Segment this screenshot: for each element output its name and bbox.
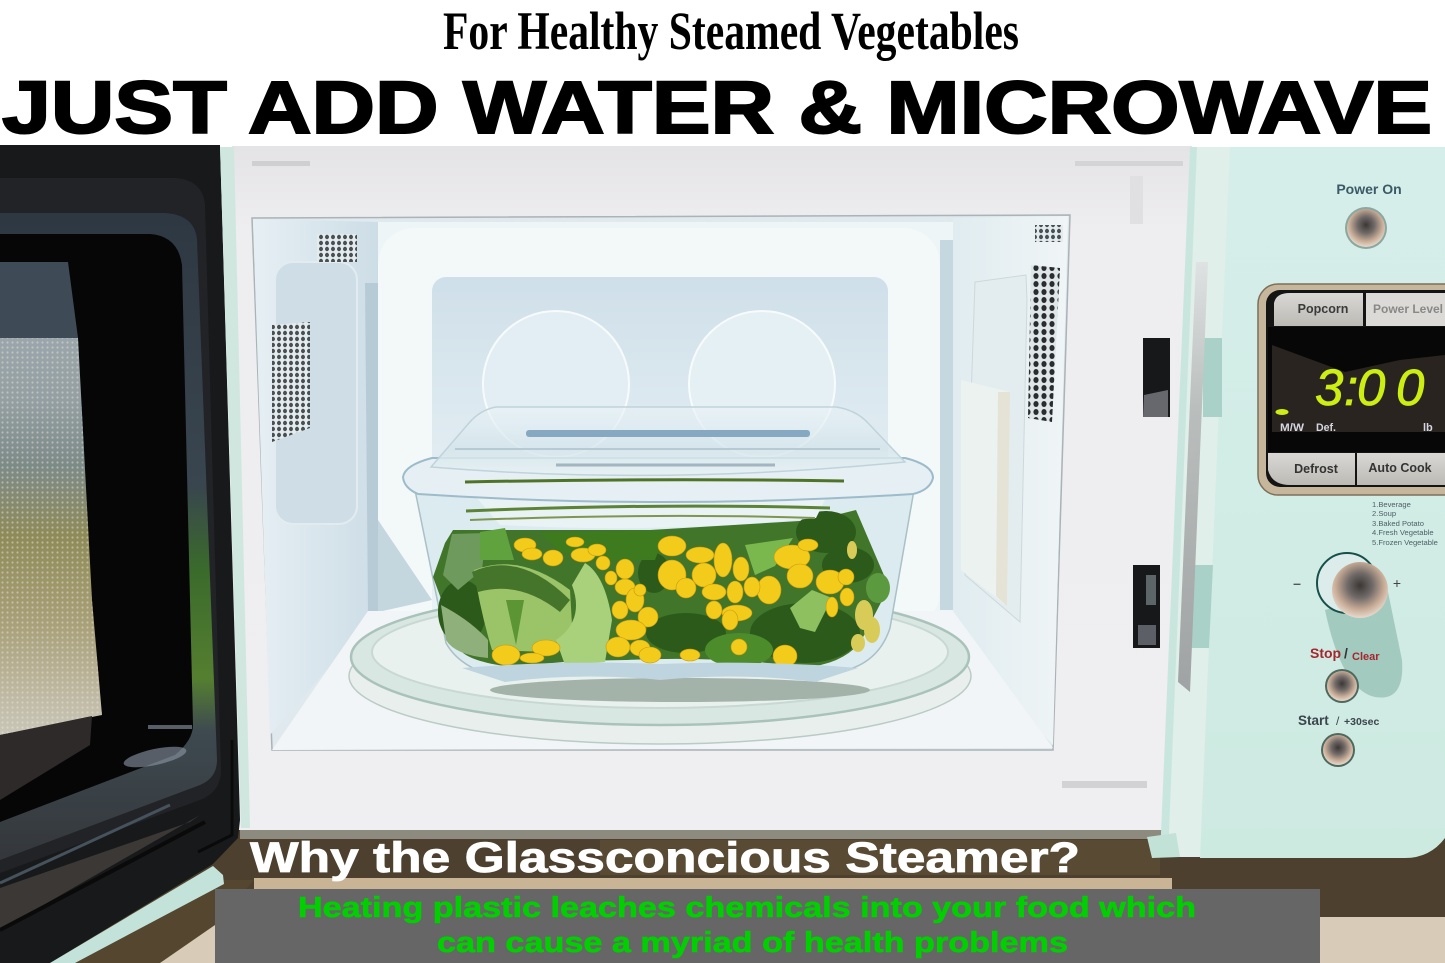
stop clear label — [1310, 645, 1380, 663]
light broccoli — [441, 528, 890, 667]
start label: Start — [1298, 713, 1329, 728]
keypad display — [1258, 284, 1445, 495]
door latch slots — [1133, 338, 1170, 648]
right wall — [953, 216, 1068, 745]
dish reflections — [462, 490, 858, 682]
vent meshes — [272, 225, 1063, 442]
panel body — [1200, 147, 1445, 858]
start button — [1321, 733, 1355, 767]
screen — [1268, 327, 1445, 452]
popcorn key: Popcorn — [1298, 302, 1348, 316]
display labels: lb — [1423, 422, 1433, 434]
dial shadow — [1325, 592, 1402, 698]
oven cavity — [252, 215, 1070, 750]
dish body — [415, 490, 914, 680]
defrost key: Defrost — [1294, 462, 1339, 476]
power level key: Power Level — [1373, 302, 1443, 316]
defrost key — [1268, 453, 1355, 485]
power level key — [1366, 293, 1445, 326]
start label: / — [1336, 714, 1340, 728]
stop clear label: Stop — [1310, 645, 1341, 661]
panel foot tab — [1147, 833, 1180, 858]
auto cook menu list: 2.Soup — [1372, 509, 1396, 518]
start label: +30sec — [1344, 716, 1379, 728]
callout text line 2: can cause a myriad of health problems — [437, 927, 1068, 959]
selector dial: – — [1293, 575, 1301, 591]
panel side strip — [1162, 147, 1232, 857]
callout background — [215, 889, 1320, 963]
subheading: Why the Glassconcious Steamer? — [250, 834, 1080, 882]
door gloss highlight — [122, 725, 192, 771]
countertop background — [40, 830, 1445, 963]
microwave white front — [232, 146, 1192, 830]
door lower mint trim — [50, 866, 224, 963]
stop clear label: Clear — [1352, 651, 1380, 663]
stop button — [1325, 669, 1359, 703]
door lower bands — [0, 805, 205, 930]
door inner black well — [0, 234, 193, 822]
waveguide cover — [961, 275, 1027, 622]
auto cook menu list: 5.Frozen Vegetable — [1372, 538, 1438, 547]
food mass — [433, 510, 889, 667]
dish rim — [403, 458, 933, 502]
keypad frame — [1258, 284, 1445, 495]
lid handle highlight — [526, 430, 810, 437]
lid bands — [455, 449, 880, 482]
turntable — [349, 589, 971, 744]
back wall recess — [432, 277, 888, 627]
power on label: Power On — [1336, 181, 1402, 197]
auto cook key — [1357, 453, 1445, 485]
glass lid — [431, 407, 905, 475]
display labels: M/W — [1280, 422, 1305, 434]
callout — [215, 889, 1320, 963]
glass steamer dish — [403, 407, 933, 682]
microwave body — [232, 146, 1192, 830]
time readout: 3:00 — [1315, 359, 1424, 416]
display labels — [1280, 422, 1433, 434]
pale corn by dish wall — [847, 541, 880, 652]
left wall — [253, 219, 378, 735]
auto cook menu list: 1.Beverage — [1372, 500, 1411, 509]
popcorn key — [1274, 293, 1363, 326]
back wall frame — [378, 222, 953, 640]
auto cook key: Auto Cook — [1368, 461, 1432, 475]
auto cook menu list: 4.Fresh Vegetable — [1372, 528, 1434, 537]
rating sticker — [1178, 262, 1208, 692]
tagline: For Healthy Steamed Vegetables — [443, 1, 1019, 61]
door hinge mark — [198, 740, 232, 852]
oven door — [0, 145, 250, 963]
door window — [0, 262, 102, 800]
auto cook menu list — [1372, 500, 1438, 547]
main heading: JUST ADD WATER & MICROWAVE — [2, 66, 1432, 149]
vegetables — [433, 510, 890, 667]
stop clear label: / — [1344, 645, 1348, 661]
selector dial — [1293, 553, 1401, 618]
callout text line 1: Heating plastic leaches chemicals into your food which — [298, 892, 1196, 924]
start label — [1298, 713, 1379, 728]
panel accent blocks — [1191, 338, 1222, 648]
power on button — [1345, 207, 1387, 249]
mode indicator — [1276, 409, 1288, 415]
title background — [0, 0, 1445, 146]
corn kernels — [492, 536, 854, 667]
display labels: Def. — [1316, 422, 1336, 434]
auto cook menu list: 3.Baked Potato — [1372, 519, 1424, 528]
control panel — [1147, 147, 1445, 858]
cavity floor — [272, 611, 1053, 750]
selector dial: + — [1393, 575, 1401, 591]
door mint edge strip — [220, 147, 250, 828]
back wall discs — [483, 311, 835, 457]
dark broccoli — [438, 511, 874, 663]
door inner frame — [0, 178, 221, 873]
